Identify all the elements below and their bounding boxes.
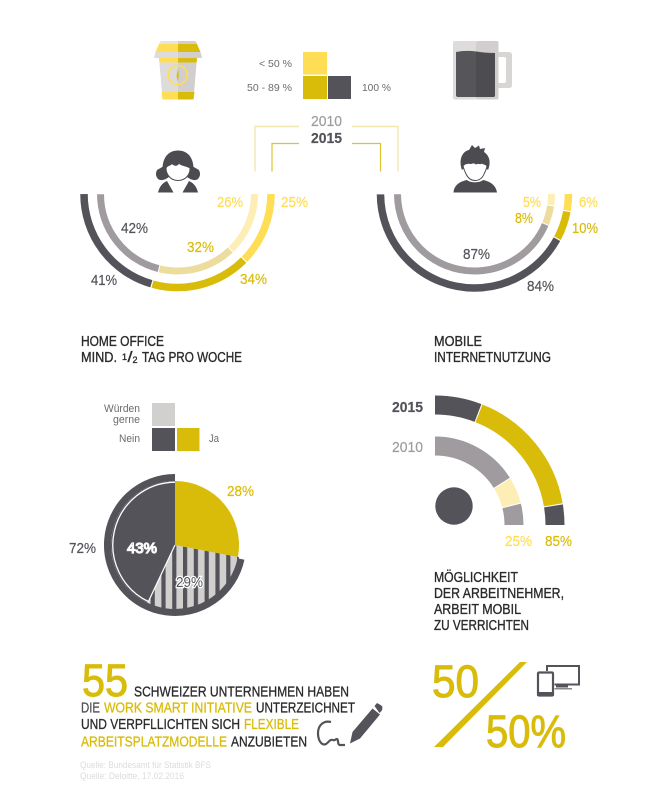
callout: 50/50%: [432, 656, 566, 757]
heading: mobile internet use: MOBILE: [434, 334, 482, 350]
heading: mobile work possibility: ARBEIT MOBIL: [434, 602, 521, 618]
callout: 55 companies: UND VERPFLLICHTEN SICH: [81, 717, 240, 733]
chart: home office pie: [69, 477, 254, 612]
year labels with brackets: [255, 113, 398, 172]
icon: pen and signature: [318, 703, 382, 745]
callout: 55 companies: [81, 655, 355, 750]
chart: home office semicircles: 25%: [281, 194, 308, 211]
callout: 55 companies: SCHWEIZER UNTERNEHMEN HABEN: [134, 684, 349, 700]
callout: 55 companies: ARBEITSPLATZMODELLE: [81, 734, 227, 750]
icon: beer mug: [453, 41, 512, 100]
heading: mobile work possibility: [434, 568, 564, 634]
chart: home office semicircles: 32%: [187, 239, 214, 256]
chart: mobile internet semicircles: [380, 194, 598, 295]
legend: share of employees: 100 %: [362, 82, 391, 94]
heading: home office: 1: [122, 352, 127, 362]
chart: home office pie: 28%: [227, 483, 254, 500]
callout: 55 companies: UNTERZEICHNET: [256, 700, 355, 716]
chart: mobile internet semicircles: 8%: [515, 210, 533, 227]
icon: woman: [156, 150, 200, 192]
callout: 55 companies: ANZUBIETEN: [231, 734, 307, 750]
chart: mobile internet semicircles: 5%: [523, 194, 541, 211]
chart: home office semicircles: 26%: [217, 194, 243, 211]
source notes: [80, 760, 211, 782]
legend: share of employees: < 50 %: [259, 58, 292, 70]
legend: pie chart: Würden: [104, 403, 140, 415]
heading: mobile internet use: [434, 334, 551, 366]
heading: home office: TAG PRO WOCHE: [142, 350, 242, 366]
callout: 55 companies: 55: [82, 655, 128, 706]
chart: wifi style quarter rings: 2015: [392, 399, 423, 416]
source notes: Quelle: Deloitte, 17.02.2016: [80, 771, 184, 782]
legend: pie chart: Nein: [119, 433, 140, 445]
legend: pie chart: [104, 403, 220, 451]
heading: mobile work possibility: MÖGLICHKEIT: [434, 568, 518, 586]
callout: 55 companies: FLEXIBLE: [244, 717, 299, 733]
chart: wifi style quarter rings: 25%: [505, 533, 532, 550]
chart: mobile internet semicircles: 84%: [527, 278, 554, 295]
heading: home office: /: [128, 350, 134, 366]
icon: man: [454, 145, 497, 192]
icon: monitor and phone: [536, 666, 579, 697]
chart: wifi style quarter rings: 85%: [545, 533, 572, 550]
legend: pie chart: Ja: [209, 433, 220, 445]
source notes: Quelle: Bundesamt für Statistik BFS: [80, 760, 211, 771]
callout: 50/50%: 50: [432, 656, 479, 707]
chart: mobile internet semicircles: 10%: [572, 220, 598, 237]
year labels with brackets: 2010: [311, 113, 342, 130]
callout: 55 companies: DIE: [81, 700, 100, 716]
chart: wifi style quarter rings: 2010: [392, 439, 423, 456]
chart: home office semicircles: 42%: [121, 220, 148, 237]
legend: share of employees: 50 - 89 %: [247, 82, 292, 94]
heading: home office: [81, 334, 242, 366]
heading: home office: MIND.: [81, 350, 117, 366]
chart: wifi style quarter rings: [392, 399, 572, 550]
heading: mobile work possibility: ZU VERRICHTEN: [434, 618, 529, 634]
chart: home office pie: 72%: [69, 540, 96, 557]
chart: home office semicircles: [84, 194, 308, 289]
callout: 50/50%: 50%: [486, 706, 566, 757]
heading: home office: HOME OFFICE: [81, 334, 164, 350]
year labels with brackets: 2015: [311, 130, 342, 147]
chart: home office semicircles: 34%: [240, 271, 267, 288]
chart: mobile internet semicircles: 87%: [463, 246, 490, 263]
legend: share of employees: [247, 52, 391, 99]
chart: mobile internet semicircles: 6%: [579, 194, 598, 211]
chart: home office semicircles: 41%: [91, 272, 117, 289]
heading: mobile work possibility: DER ARBEITNEHMER,: [434, 586, 564, 602]
icon: coffee cup: [154, 41, 202, 100]
callout: 55 companies: WORK SMART INITIATIVE: [104, 700, 252, 716]
legend: pie chart: gerne: [113, 414, 140, 426]
chart: home office pie: 29%: [176, 574, 203, 591]
chart: home office pie: 43%: [127, 540, 157, 557]
heading: home office: 2: [132, 355, 138, 365]
heading: mobile internet use: INTERNETNUTZUNG: [434, 350, 551, 366]
